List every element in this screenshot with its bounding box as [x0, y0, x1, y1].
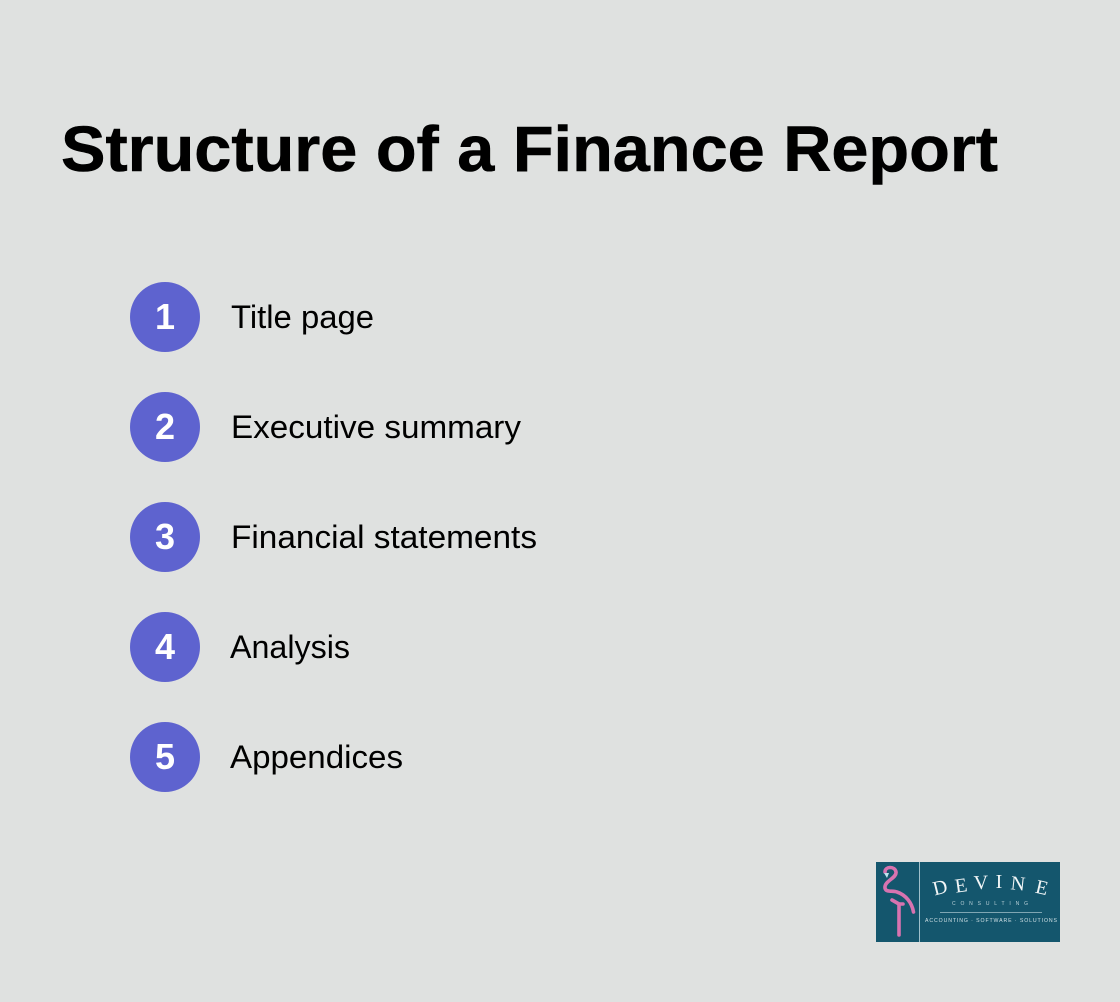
icon: flamingo: [885, 868, 914, 935]
brand tagline: ACCOUNTING · SOFTWARE · SOLUTIONS: [925, 918, 1058, 924]
item 4: analysis: [130, 612, 350, 682]
brand subtitle: CONSULTING: [952, 901, 1028, 907]
item 5: appendices: Appendices: [230, 739, 403, 775]
item 5: appendices: [130, 722, 403, 792]
brand name: I: [996, 871, 1002, 893]
item 2: executive summary: 2: [155, 406, 175, 447]
brand name: D: [931, 876, 950, 900]
item 3: financial statements: Financial statements: [231, 519, 537, 555]
item 4: analysis: 4: [155, 626, 175, 667]
brand name: [931, 871, 1050, 900]
logo: Devine Consulting: [876, 862, 1060, 942]
item 2: executive summary: Executive summary: [231, 409, 521, 445]
item 4: analysis: Analysis: [230, 629, 350, 665]
brand name: E: [1033, 876, 1050, 900]
item 1: title page: [130, 282, 374, 352]
item 3: financial statements: 3: [155, 516, 175, 557]
item 5: appendices: 5: [155, 736, 175, 777]
item 2: executive summary: [130, 392, 521, 462]
brand name: E: [954, 874, 969, 898]
brand name: V: [973, 872, 989, 894]
item 3: financial statements: [130, 502, 537, 572]
item 1: title page: 1: [155, 296, 175, 337]
title: Structure of a Finance Report: [61, 113, 998, 185]
item 1: title page: Title page: [231, 299, 374, 335]
list of report sections: [130, 282, 537, 792]
brand name: N: [1010, 872, 1026, 896]
